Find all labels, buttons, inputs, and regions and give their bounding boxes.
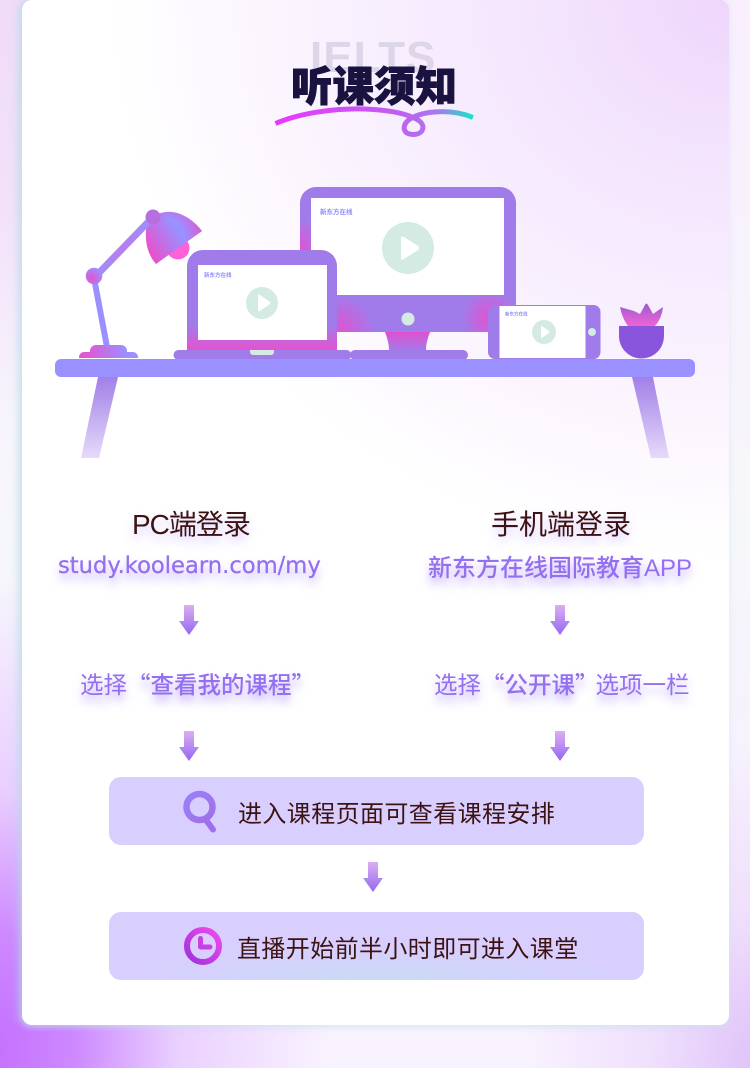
mobile app name: 新东方在线国际教育APP xyxy=(428,555,692,582)
title: 听课须知 xyxy=(291,63,457,110)
arrow xyxy=(550,605,570,635)
desk lamp xyxy=(79,210,202,358)
arrow xyxy=(179,731,199,761)
arrow xyxy=(179,605,199,635)
step text: live start: 直播开始前半小时即可进入课堂 xyxy=(237,936,579,963)
arrow xyxy=(550,731,570,761)
phone: 新东方在线 xyxy=(505,310,528,318)
heading: mobile login: 手机端登录 xyxy=(491,509,631,540)
panel: course page step xyxy=(109,777,644,845)
mobile step: public course tab: 选择“公开课”选项一栏 xyxy=(434,666,690,700)
step text: course page: 进入课程页面可查看课程安排 xyxy=(238,801,555,828)
arrow xyxy=(363,862,383,892)
PC step: view my courses: 选择“查看我的课程” xyxy=(80,666,315,700)
plant xyxy=(619,304,664,358)
desk top xyxy=(55,359,695,377)
PC login address: study.koolearn.com/my xyxy=(58,553,321,579)
desktop monitor xyxy=(300,187,516,360)
desk legs xyxy=(81,377,669,458)
icon: magnifier xyxy=(186,794,213,830)
desktop monitor: 新东方在线 xyxy=(320,207,353,216)
laptop xyxy=(174,250,352,360)
panel: live start step xyxy=(109,912,644,980)
watermark: IELTS: IELTS xyxy=(310,33,436,82)
laptop: 新东方在线 xyxy=(204,271,232,279)
icon: clock xyxy=(187,930,219,962)
heading: PC login: PC端登录 xyxy=(132,509,250,540)
phone xyxy=(488,305,600,359)
